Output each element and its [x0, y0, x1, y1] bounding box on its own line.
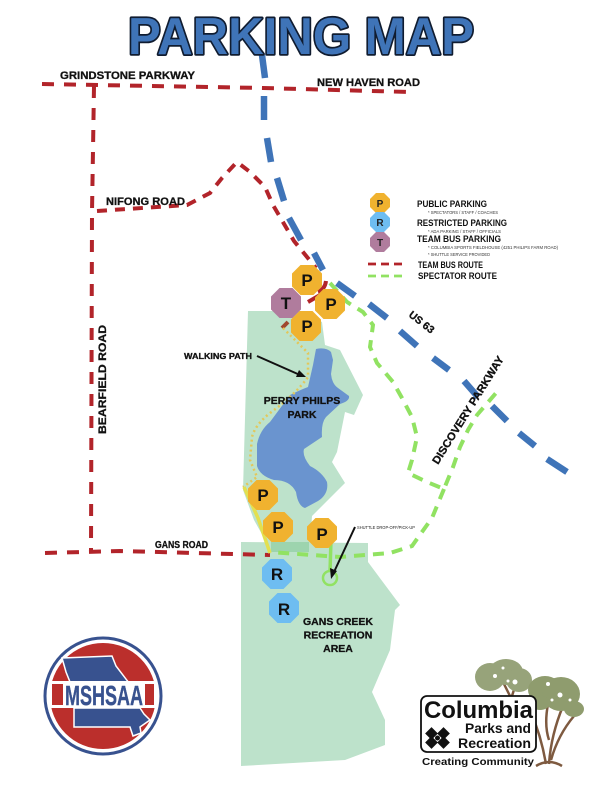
marker: restricted parking R: R [271, 565, 283, 584]
yellow path to Gans Road [244, 487, 270, 553]
arrow: walking path pointer [257, 356, 306, 377]
legend text: public parking: PUBLIC PARKING [417, 199, 487, 210]
marker: public parking P [307, 518, 337, 548]
legend icon: team bus parking [370, 232, 390, 252]
logo: MSHSAA [45, 638, 161, 754]
walking path [243, 328, 308, 487]
marker: public parking P [263, 512, 293, 542]
marker: restricted parking R: R [278, 600, 290, 619]
Recreation: Recreation [458, 736, 531, 751]
tagline: Creating Community [422, 756, 534, 768]
label: New Haven Road: NEW HAVEN ROAD [317, 77, 420, 89]
highway: US 63 [262, 55, 567, 472]
foliage speckles [493, 666, 572, 702]
title: PARKING MAP [128, 8, 474, 66]
marker: team bus T: T [281, 294, 292, 313]
legend text: spectator route: SPECTATOR ROUTE [418, 271, 497, 282]
marker: public parking P [248, 480, 278, 510]
legend note: restricted: * ADA PARKING / STAFF / OFFICIALS [428, 229, 501, 234]
arrow: shuttle pointer [330, 527, 355, 579]
legend text: team bus parking: TEAM BUS PARKING [417, 234, 501, 245]
Columbia: Columbia [424, 697, 534, 724]
logo box [421, 696, 536, 752]
legend icon: public parking: P [377, 199, 384, 210]
white band lines [50, 681, 156, 708]
legend [368, 193, 559, 282]
marker: public parking P [291, 311, 321, 341]
label: Bearfield Road: BEARFIELD ROAD [97, 325, 109, 434]
overlap strip near Gans Road [271, 542, 309, 552]
legend text: restricted parking: RESTRICTED PARKING [417, 218, 507, 229]
spectator route: green dashes [270, 283, 496, 572]
label: Gans Creek Recreation Area: RECREATION [304, 630, 372, 642]
red band right [145, 684, 154, 705]
legend icon: team bus parking: T [377, 238, 383, 249]
emblem [425, 727, 450, 749]
panel: Gans Creek Recreation Area green area [241, 542, 400, 766]
marker: public parking P: P [301, 317, 313, 336]
marker: team bus T [271, 288, 301, 318]
marker: public parking P [315, 289, 345, 319]
label: Gans Road: GANS ROAD [155, 540, 208, 551]
label: Grindstone Parkway: GRINDSTONE PARKWAY [60, 70, 196, 82]
legend icon: public parking [370, 193, 390, 213]
label: Discovery Parkway: DISCOVERY PARKWAY [430, 354, 507, 467]
label: Shuttle drop-off: SHUTTLE DROP-OFF/PICK-UP [357, 525, 415, 531]
marker: public parking P: P [301, 271, 313, 290]
legend text: team bus route: TEAM BUS ROUTE [418, 260, 483, 271]
legend icon: restricted parking: R [376, 218, 384, 229]
label: Gans Creek Recreation Area: AREA [323, 643, 353, 655]
marker: public parking P: P [316, 525, 328, 544]
marker: public parking P: P [272, 518, 284, 537]
team bus route: red roads [42, 84, 410, 555]
label: Perry Philps Park: PERRY PHILPS [264, 395, 340, 407]
legend note: public: * SPECTATORS / STAFF / COACHES [428, 210, 498, 215]
label: US 63: US 63 [406, 309, 437, 336]
legend swatch: spectator route [368, 275, 403, 277]
red band left [52, 684, 63, 705]
legend note: shuttle: * SHUTTLE SERVICE PROVIDED [428, 252, 490, 257]
Parks and: Parks and [465, 721, 531, 736]
label: Gans Creek Recreation Area: GANS CREEK [303, 616, 373, 628]
label: Perry Philps Park: PARK [288, 409, 317, 421]
trees [475, 659, 584, 766]
legend icon: restricted parking [370, 212, 390, 232]
state of Missouri: south part [74, 708, 150, 736]
marker: public parking P: P [325, 295, 337, 314]
logo: Columbia Parks and Recreation [421, 659, 584, 768]
shuttle stop circle [323, 571, 337, 585]
panel: lake [257, 348, 349, 508]
state of Missouri: north part [62, 656, 141, 700]
marker: restricted parking R [269, 593, 299, 623]
legend note: fieldhouse: * COLUMBIA SPORTS FIELDHOUSE (4251 PHILIPS FARM ROAD) [428, 245, 559, 250]
legend swatch: team bus route [368, 263, 403, 265]
MSHSAA text: MSHSAA [65, 680, 143, 711]
panel: Perry Philips Park green area [243, 311, 363, 545]
marker: restricted parking R [262, 559, 292, 589]
marker: public parking P: P [257, 486, 269, 505]
label: Walking Path: WALKING PATH [184, 352, 252, 361]
marker: public parking P [292, 265, 322, 295]
label: Nifong Road: NIFONG ROAD [106, 196, 185, 208]
